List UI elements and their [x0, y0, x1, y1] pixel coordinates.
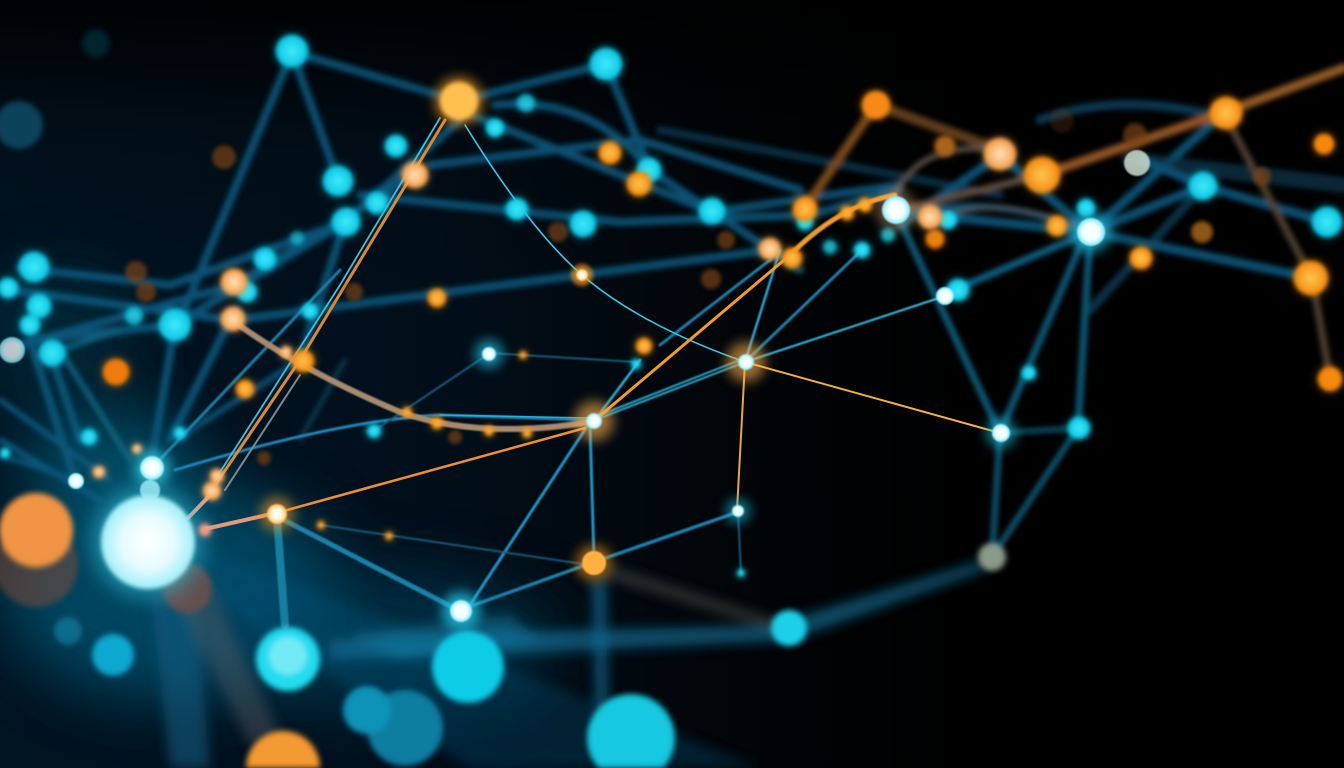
bright thin lines [188, 118, 1000, 529]
far blurred beams [150, 545, 985, 768]
upper network lines [0, 52, 1344, 557]
mid network lines [150, 250, 945, 625]
blurred foreground nodes [0, 29, 1006, 768]
pale orange nodes [93, 138, 1016, 500]
orange nodes [103, 91, 1342, 540]
cyan nodes [0, 35, 1342, 577]
hot orange-white nodes [260, 77, 766, 581]
main white node [92, 486, 204, 598]
white cyan nodes [0, 150, 1150, 630]
dim background nodes [125, 109, 1271, 465]
ambient glow [0, 270, 560, 710]
